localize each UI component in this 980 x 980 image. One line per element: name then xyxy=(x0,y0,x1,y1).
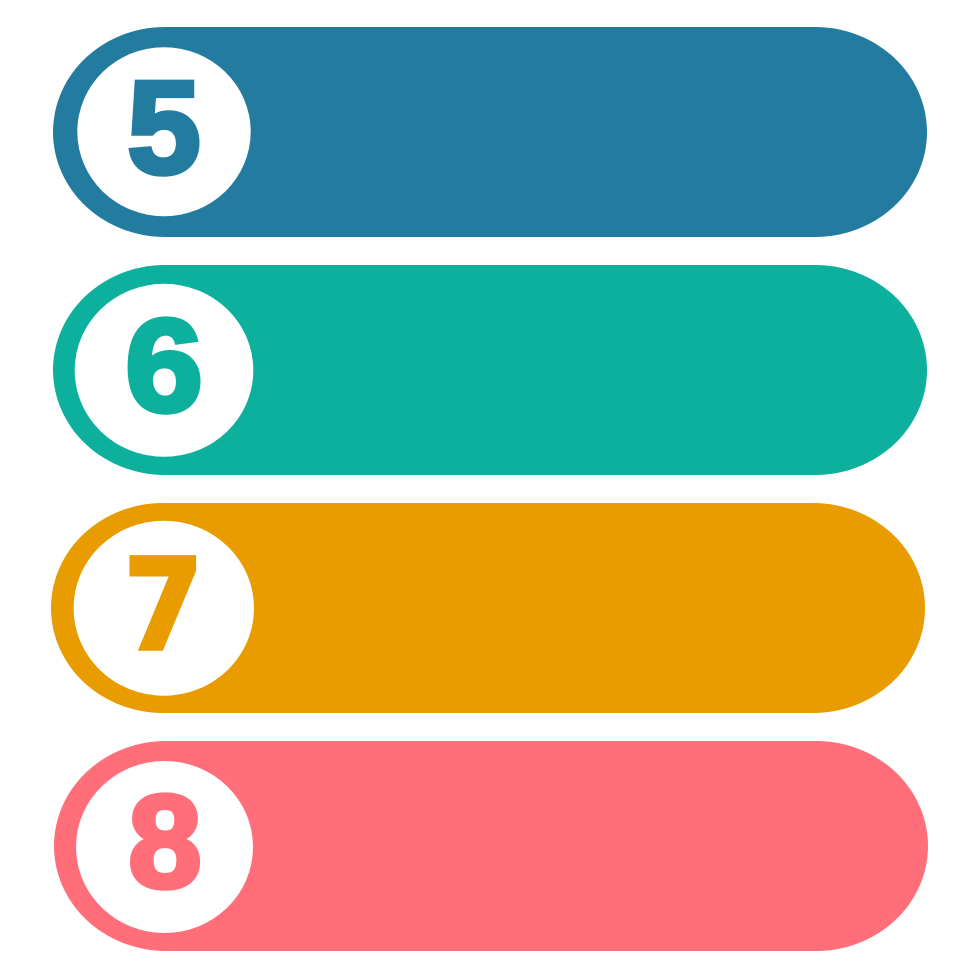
number: 5: 5 xyxy=(127,54,201,201)
bar: step 6 xyxy=(53,265,927,475)
panel: step 8 xyxy=(54,741,928,951)
number: 8: 8 xyxy=(128,768,202,915)
circle: step 6 xyxy=(75,284,253,457)
bar: step 8 xyxy=(54,741,928,951)
bar: step 5 xyxy=(53,27,927,237)
panel: step 7 xyxy=(51,503,925,713)
bar: step 7 xyxy=(51,503,925,713)
circle: step 7 xyxy=(74,521,254,696)
number: 7: 7 xyxy=(124,533,203,679)
circle: step 8 xyxy=(76,761,253,933)
panel: step 6 xyxy=(53,265,927,475)
panel: step 5 xyxy=(53,27,927,237)
number: 6: 6 xyxy=(125,292,203,439)
circle: step 5 xyxy=(77,47,251,216)
